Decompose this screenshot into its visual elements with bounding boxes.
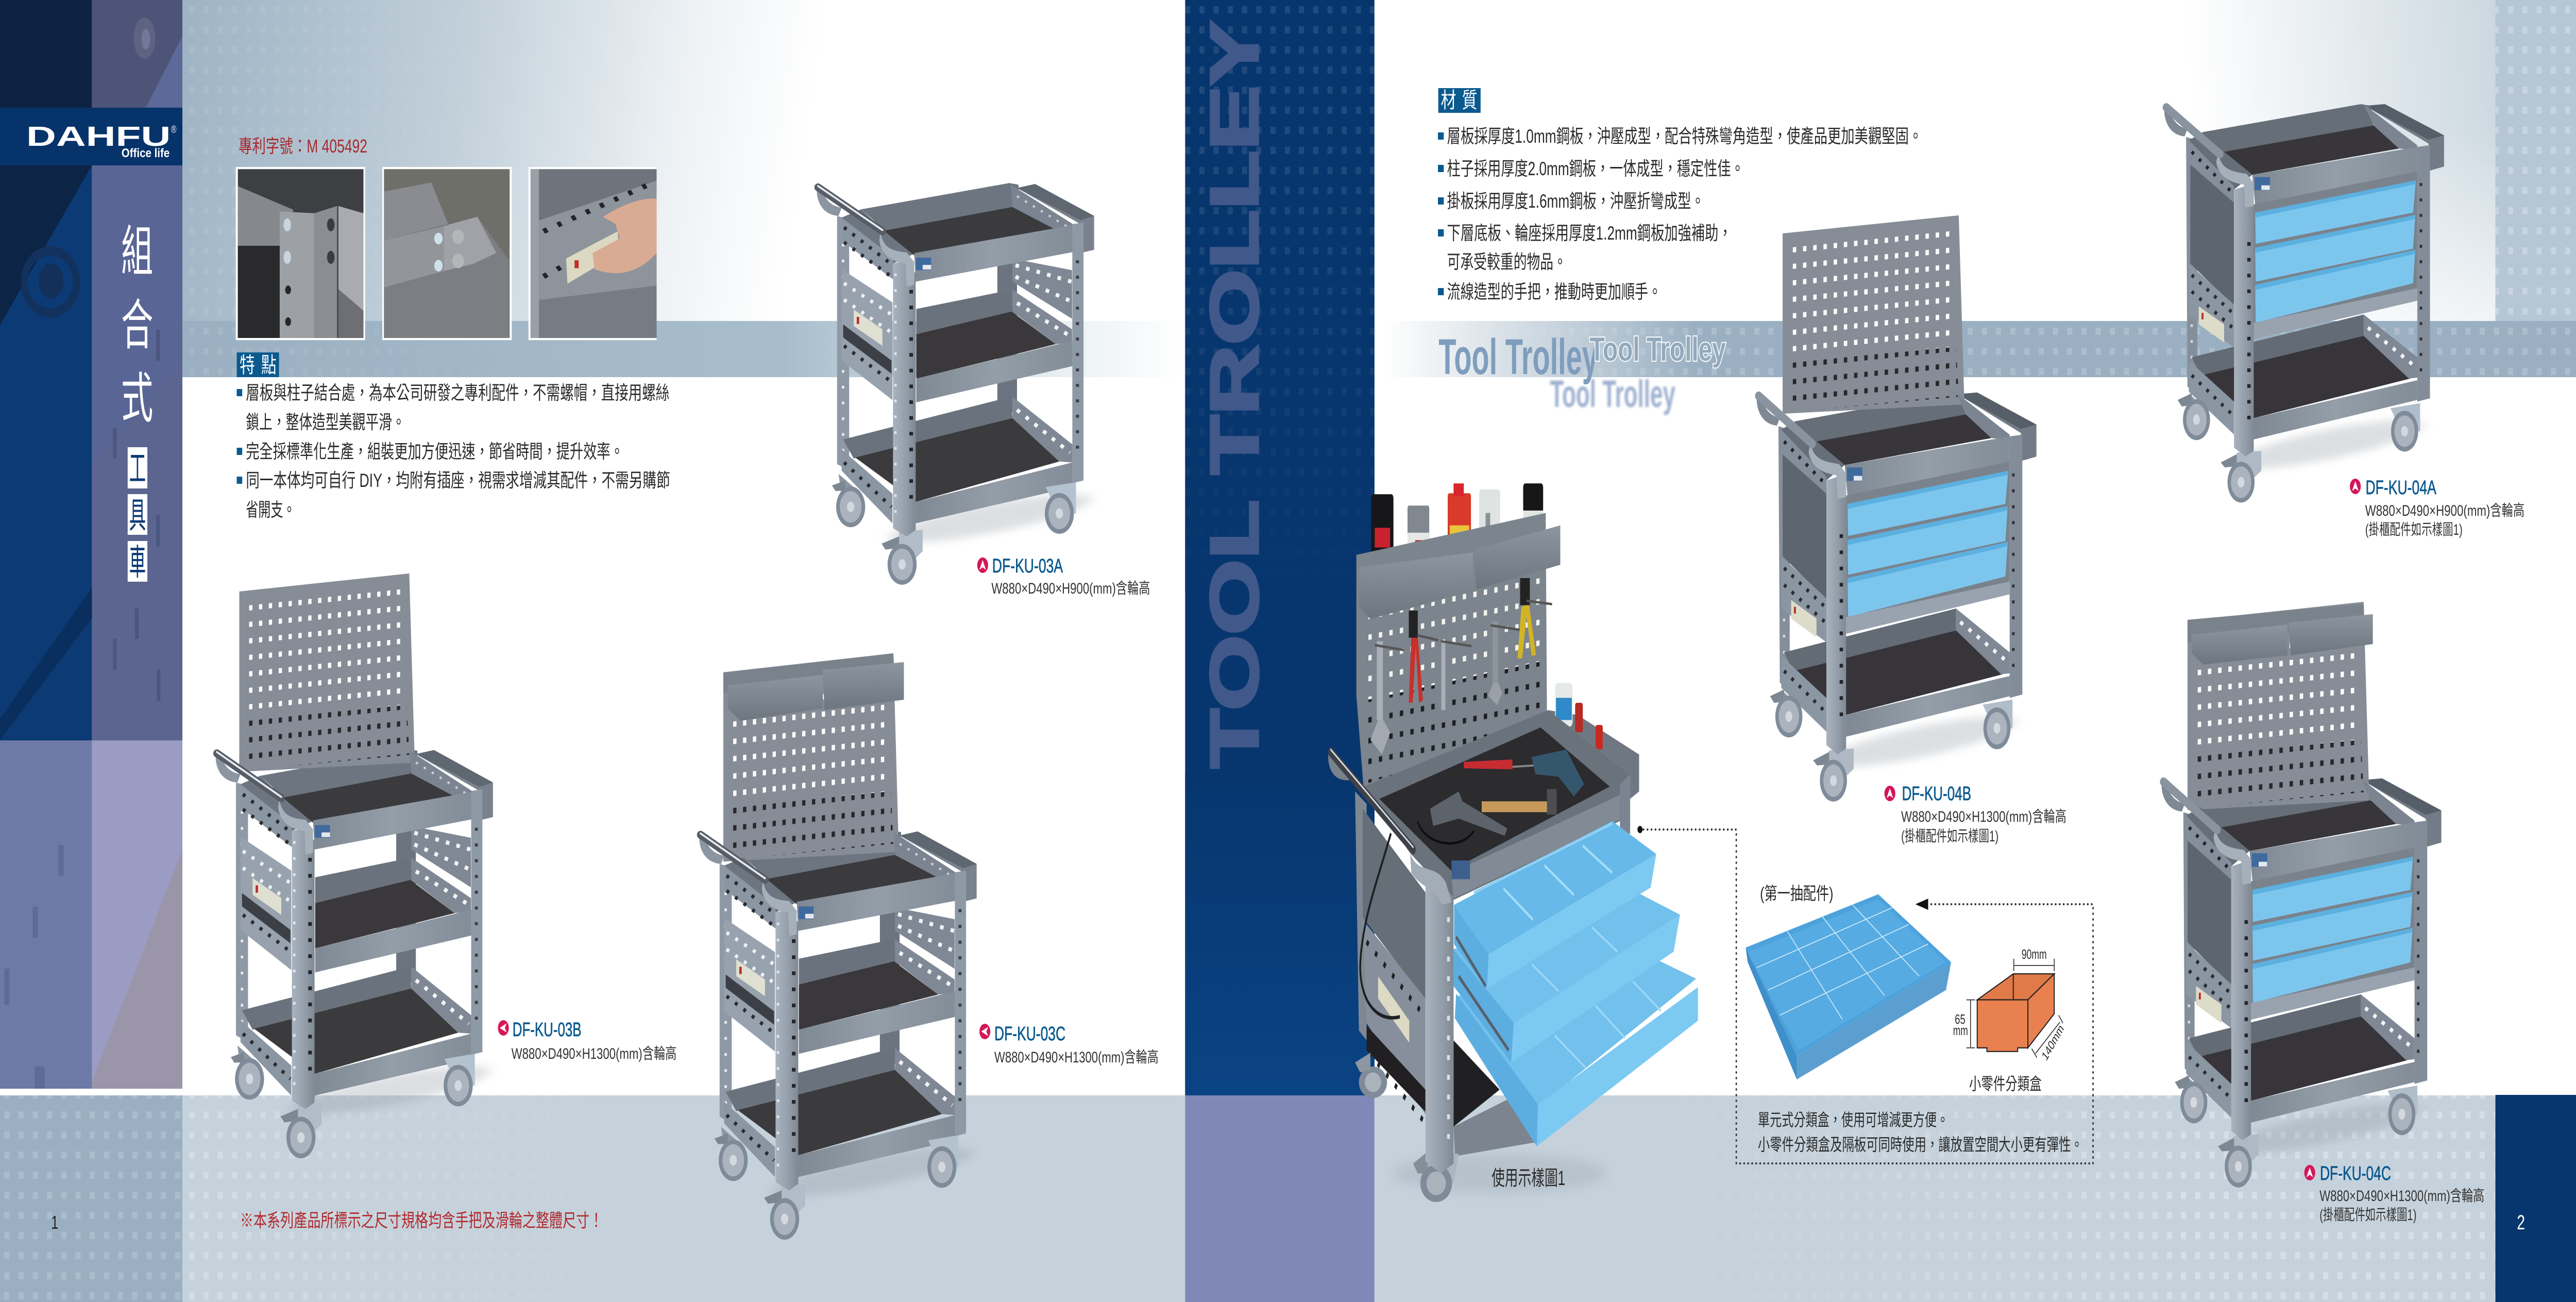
pegboard [1357, 513, 1547, 794]
front post [1426, 880, 1453, 1174]
vertical badges: 工具車: 具 [129, 496, 146, 535]
usage illustration trolley with open drawers [1328, 483, 1698, 1202]
page number 2: 2 [2517, 1211, 2525, 1234]
photo: tray corner [382, 167, 512, 340]
page number 1: 1 [51, 1212, 58, 1233]
caption: DF-KU-03A: DF-KU-03A [992, 554, 1063, 577]
word art: solid: Tool Trolley [1438, 329, 1598, 385]
word art: outlined: Tool Trolley [1590, 330, 1726, 368]
caption: DF-KU-03B: DF-KU-03B [513, 1018, 582, 1040]
vertical title: 組合式: 合 [121, 296, 153, 356]
front panel of top [1451, 795, 1620, 899]
hanging tools [1370, 578, 1552, 754]
spray cans [1371, 483, 1543, 576]
page 2 background [1375, 0, 2576, 1302]
caption: small parts box: 小零件分類盒 [1969, 1075, 2042, 1094]
arrow: points to organiser tray [1916, 899, 1928, 910]
product: DF-KU-03C trolley [699, 653, 977, 1240]
caption: DF-KU-03C: W880×D490×H1300(mm)含輪高 [994, 1048, 1159, 1066]
organiser tray [1745, 894, 1951, 1079]
caption: DF-KU-03B: W880×D490×H1300(mm)含輪高 [512, 1044, 676, 1062]
wheels [1355, 1053, 1459, 1202]
photo: shelf and post joint [236, 167, 365, 340]
product: DF-KU-03B trolley [215, 573, 493, 1158]
materials list: 流線造型的手把，推動時更加順手。 [1447, 281, 1662, 302]
caption: DF-KU-04A: (掛櫃配件如示樣圖1) [2365, 520, 2463, 538]
vertical title: 組合式: 組 [121, 222, 153, 282]
tool trolley word art [1438, 329, 1726, 415]
dimension labels: 90mm [2022, 947, 2047, 962]
top tray base [1364, 710, 1630, 900]
footnote: ※本系列產品所標示之尺寸規格均含手把及滑輪之整體尺寸！ [240, 1210, 603, 1231]
caption: DF-KU-03A [977, 554, 1150, 597]
patent number: 專利字號：M 405492 [239, 136, 367, 157]
materials list: 下層底板、輪座採用厚度1.2mm鋼板加強補助， [1447, 223, 1732, 244]
vertical badges: 工具車: 工 [129, 449, 146, 488]
vertical title: 組合式: 式 [121, 369, 153, 429]
caption: DF-KU-04C: DF-KU-04C [2320, 1162, 2391, 1184]
drawer 3 [1455, 957, 1698, 1146]
navy spine [1185, 0, 1375, 1302]
materials list: 可承受較重的物品。 [1447, 251, 1567, 273]
product: DF-KU-04A trolley [2164, 104, 2444, 502]
registered mark: ® [171, 124, 177, 136]
materials list: 柱子採用厚度2.0mm鋼板，一体成型，穩定性佳。 [1447, 158, 1744, 179]
side tray and items [1548, 683, 1639, 799]
right rear post [1620, 774, 1630, 838]
logo: tagline: Office life [122, 146, 170, 160]
vertical title: 組合式 [121, 222, 153, 429]
caption: DF-KU-04C [2304, 1162, 2484, 1224]
detail photos [236, 167, 656, 340]
materials list [1438, 126, 1922, 302]
parts box diagram [1967, 959, 2063, 1058]
heading: 特點: 特點 [240, 353, 277, 377]
dimension labels: 65 [1955, 1012, 1965, 1027]
callout text: 單元式分類盒，使用可增減更方便。 [1758, 1111, 1948, 1130]
features list: 省開支。 [246, 499, 295, 520]
caption: DF-KU-03B [498, 1018, 676, 1062]
caption: DF-KU-04A: DF-KU-04A [2365, 476, 2436, 498]
logo band [0, 108, 182, 165]
product: DF-KU-04C trolley [2162, 602, 2442, 1188]
product: DF-KU-04B trolley [1757, 215, 2037, 802]
work surface [1379, 728, 1609, 870]
dimension labels [1953, 947, 2066, 1063]
dimension labels: mm [1953, 1023, 1968, 1038]
vertical badges: 工具車: 車 [129, 543, 146, 582]
hanging trays [1359, 526, 1561, 619]
heading: 材質: 材質 [1441, 88, 1477, 112]
caption: DF-KU-04B: DF-KU-04B [1902, 782, 1971, 804]
logo: DAHFU: DAHFU [26, 121, 171, 152]
caption: DF-KU-03C [979, 1022, 1159, 1066]
tools on work surface [1418, 750, 1584, 843]
callout text: 小零件分類盒及隔板可同時使用，讓放置空間大小更有彈性。 [1758, 1136, 2083, 1155]
caption: DF-KU-04A: W880×D490×H900(mm)含輪高 [2365, 501, 2524, 519]
callout: dotted leader [1637, 826, 2093, 1163]
drawer 1 [1454, 821, 1656, 989]
label: first drawer accessory: (第一抽配件) [1760, 884, 1833, 904]
caption: DF-KU-04B [1885, 782, 2066, 845]
vertical badges: 工具車 [128, 447, 147, 582]
dimension labels: 140mm [2040, 1022, 2066, 1063]
features list: 完全採標準化生產，組裝更加方便迅速，節省時間，提升效率。 [246, 441, 624, 462]
caption: DF-KU-04A [2350, 476, 2524, 538]
caption: DF-KU-04C: (掛櫃配件如示樣圖1) [2319, 1206, 2417, 1224]
features list [237, 382, 670, 520]
caption: DF-KU-03A: W880×D490×H900(mm)含輪高 [991, 579, 1150, 597]
caption: DF-KU-04C: W880×D490×H1300(mm)含輪高 [2319, 1187, 2484, 1205]
left sidebar panel [0, 0, 182, 1089]
word art: blurred: Tool Trolley [1550, 373, 1675, 415]
features list: 鎖上，整体造型美觀平滑。 [246, 412, 405, 433]
spine title: TOOL TROLLEY [1197, 21, 1273, 768]
features list: 同一本体均可自行 DIY，均附有插座，視需求增減其配件，不需另購節 [246, 470, 670, 491]
drawer 2 [1453, 888, 1680, 1062]
materials list: 層板採厚度1.0mm鋼板，沖壓成型，配合特殊彎角造型，使產品更加美觀堅固。 [1447, 126, 1922, 147]
materials list: 掛板採用厚度1.6mm鋼板，沖壓折彎成型。 [1447, 191, 1705, 212]
lower shelf [1453, 1040, 1540, 1156]
callout text [1758, 1111, 2083, 1155]
product: DF-KU-03A trolley [817, 183, 1094, 585]
caption: usage illustration: 使用示樣圖1 [1492, 1167, 1565, 1190]
caption: DF-KU-04B: (掛櫃配件如示樣圖1) [1901, 827, 1998, 845]
caption: DF-KU-03C: DF-KU-03C [994, 1022, 1065, 1044]
photo: power socket and hand [529, 167, 656, 340]
left side frame [1355, 791, 1426, 1122]
handle [1328, 750, 1470, 905]
page 1 background [0, 0, 1185, 1302]
caption: DF-KU-04B: W880×D490×H1300(mm)含輪高 [1901, 807, 2066, 825]
features list: 層板與柱子結合處，為本公司研發之專利配件，不需螺帽，直接用螺絲 [246, 382, 669, 403]
